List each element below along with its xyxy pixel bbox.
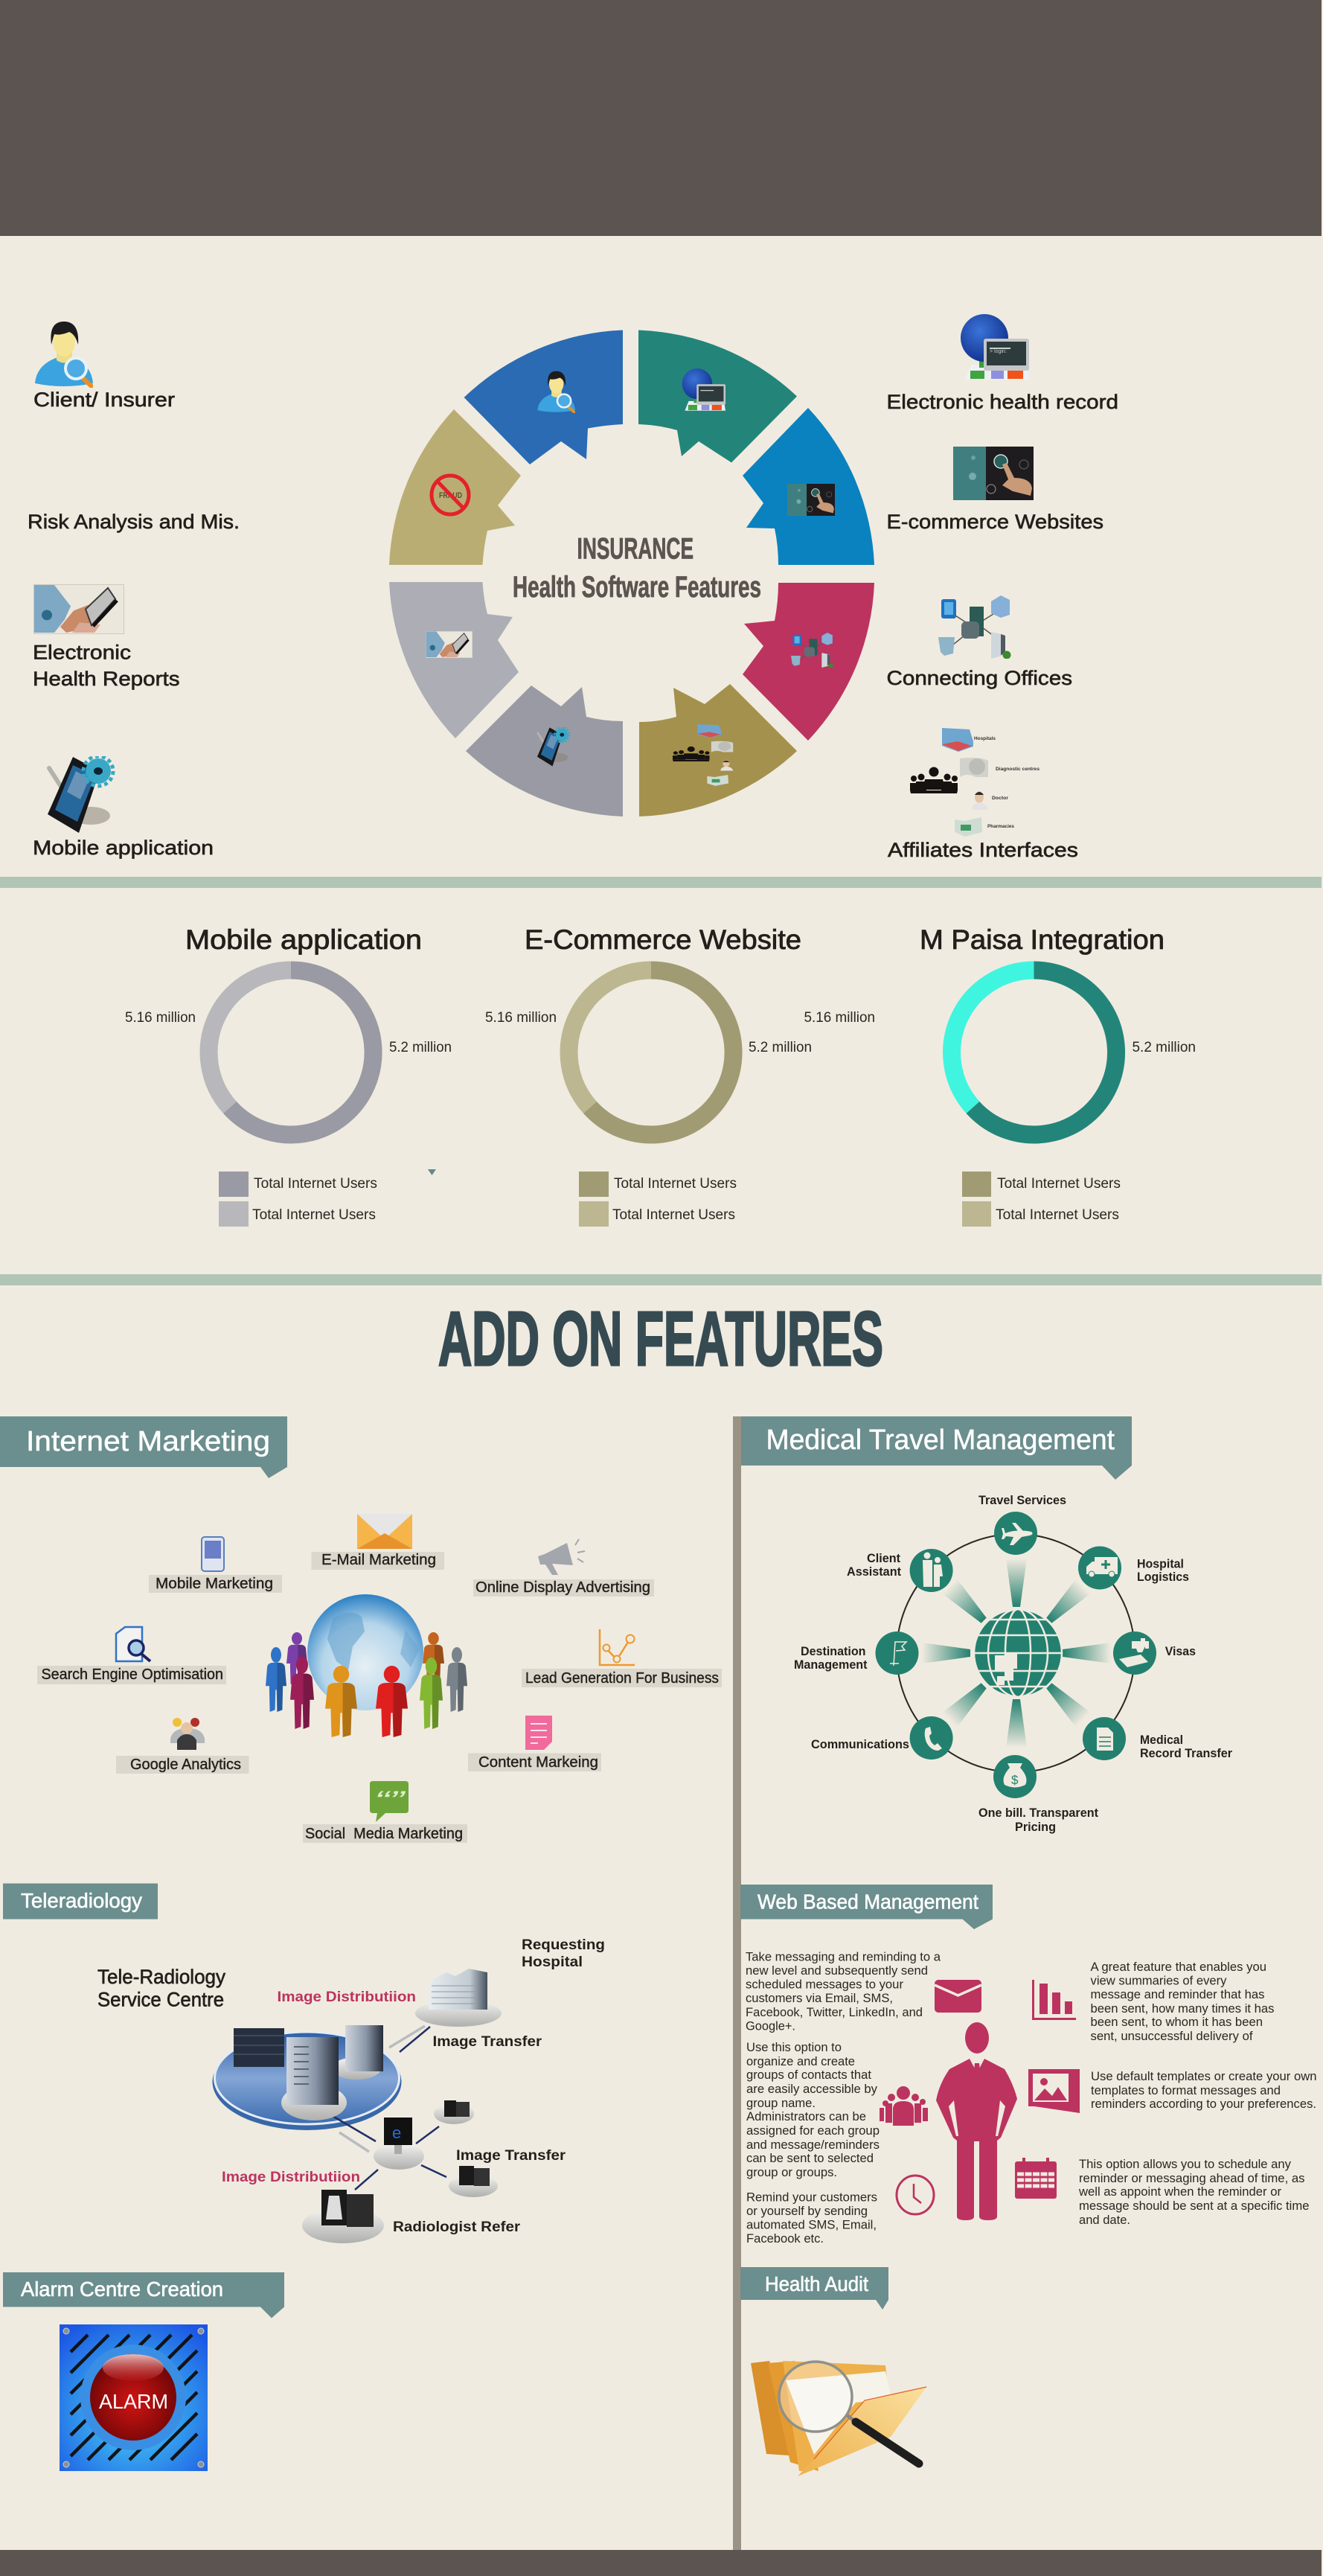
item: social media marketing: [303, 1781, 467, 1843]
icon: affiliates: Pharmacies: [987, 824, 1014, 829]
values: [485, 1010, 875, 1055]
center title: INSURANCE: [577, 533, 693, 566]
label: client: Client/ Insurer: [33, 389, 175, 411]
text: scheduled messages: Google+.: [746, 2020, 795, 2033]
node: medical record transfer: [1083, 1717, 1126, 1760]
panel: m paisa integration donut: [920, 924, 1196, 1227]
labels: Logistics: [1137, 1570, 1189, 1584]
item: online display advertising: Online Display Advertising: [475, 1579, 650, 1596]
icon: tablet photo: [34, 584, 124, 634]
icon: alarm button: [60, 2324, 208, 2471]
icon: calendar: [1015, 2158, 1057, 2199]
text: groups: group or groups.: [746, 2166, 837, 2179]
text: groups: groups of contacts that: [746, 2068, 871, 2082]
center title: Health Software Features: [513, 571, 761, 604]
text: reminders: automated SMS, Email,: [746, 2218, 877, 2231]
title: add on features: ADD ON FEATURES: [438, 1296, 883, 1381]
legend: Total Internet Users: [252, 1207, 376, 1223]
text: reminders: Facebook etc.: [746, 2232, 824, 2246]
service centre label: [97, 1966, 225, 2011]
text: groups: Use this option to: [746, 2041, 842, 2054]
section band: [0, 1274, 1322, 1285]
labels: Management: [794, 1658, 868, 1672]
item: lead generation: Lead Generation For Business: [525, 1670, 719, 1687]
text: summaries: view summaries of every: [1091, 1974, 1227, 1987]
teal globe: [974, 1609, 1062, 1697]
labels: Record Transfer: [1140, 1747, 1233, 1760]
panel: teleradiology: [3, 1883, 605, 2243]
viewer node bottom: [302, 2190, 384, 2243]
item: social media marketing: “”: [374, 1786, 406, 1815]
label: mobile application: Mobile application: [33, 837, 214, 859]
vertical divider: [733, 1416, 741, 2550]
requesting hospital label: [522, 1937, 605, 1970]
legend: Total Internet Users: [614, 1176, 737, 1192]
icon: connecting offices: [938, 595, 1010, 659]
wheel icon: client: [537, 371, 575, 412]
requesting hospital label: Requesting: [522, 1937, 605, 1953]
wheel segment: connecting offices: [743, 583, 874, 741]
banner: [740, 2267, 888, 2310]
footer bar: [0, 2550, 1322, 2576]
wheel segment: mobile: [466, 685, 623, 816]
item: e-mail marketing: E-Mail Marketing: [321, 1552, 436, 1568]
heading: Mobile application: [185, 924, 422, 955]
text: reminders: Remind your customers: [746, 2191, 877, 2205]
wheel icon: affiliates: [673, 724, 733, 786]
icon: electronic health record: > login:: [990, 349, 1007, 354]
text: groups: group name.: [746, 2097, 816, 2110]
item: mobile marketing: Mobile Marketing: [156, 1576, 273, 1592]
heading: E-Commerce Website: [525, 924, 801, 955]
node: client assistant: [910, 1549, 953, 1592]
item: mobile marketing: [149, 1537, 282, 1593]
legend: Total Internet Users: [612, 1207, 735, 1223]
text: groups: can be sent to selected: [746, 2152, 874, 2165]
item: content marketing: Content Markeing: [478, 1754, 598, 1771]
values: 5.16 million: [804, 1010, 875, 1026]
section band: [0, 877, 1322, 888]
wheel icon: connecting: [791, 633, 833, 668]
text: templates: Use default templates or create your own: [1091, 2070, 1317, 2083]
central disc: [213, 2032, 402, 2130]
value left: 5.16 million: [125, 1010, 196, 1026]
central globe with people: [266, 1594, 467, 1737]
icon: e-commerce photo: [953, 447, 1034, 500]
label: electronic health reports: Electronic: [33, 642, 131, 664]
diagram labels: Image Transfer: [433, 2034, 542, 2050]
text: scheduled messages: Take messaging and reminding to a: [746, 1950, 941, 1963]
text: summaries: been sent, how many times it has: [1091, 2002, 1274, 2016]
label: electronic health reports: Health Reports: [33, 668, 180, 690]
icon: affiliates: [910, 728, 1040, 837]
text: scheduling: [1078, 2158, 1310, 2227]
item: google analytics: [116, 1718, 249, 1774]
text: scheduling: message should be sent at a specific time: [1079, 2199, 1310, 2213]
node: destination management: [875, 1631, 918, 1675]
legend: Total Internet Users: [996, 1207, 1119, 1223]
wheel segment: electronic health record: [638, 330, 797, 463]
diagram labels: Image Distributiion: [277, 1989, 416, 2005]
donut chart: [209, 971, 374, 1134]
label: affiliates interfaces: Affiliates Interfaces: [888, 839, 1078, 861]
service centre label: Service Centre: [97, 1989, 224, 2011]
text: scheduled messages: scheduled messages to your: [746, 1978, 903, 1992]
icon: picture: [1028, 2069, 1080, 2113]
hospital node: [415, 1969, 502, 2027]
labels: Assistant: [847, 1565, 901, 1579]
ring: [897, 1534, 1135, 1772]
header bar: [0, 0, 1322, 236]
label: electronic health record: Electronic health record: [887, 391, 1118, 413]
servers: [234, 2025, 383, 2120]
icon: group: [880, 2086, 928, 2126]
item: search engine optimisation: [37, 1627, 226, 1684]
icon: envelope: [935, 1980, 981, 2013]
text: groups: assigned for each group: [746, 2124, 880, 2138]
label: risk analysis: Risk Analysis and Mis.: [28, 511, 240, 533]
diagram labels: Radiologist Refer: [393, 2219, 521, 2235]
workstation node: e: [392, 2123, 401, 2142]
panel: health audit: [740, 2267, 926, 2476]
labels: Hospital: [1137, 1557, 1184, 1570]
text: summaries: [1091, 1960, 1274, 2043]
text: scheduling: This option allows you to schedule any: [1079, 2158, 1292, 2171]
text: summaries: message and reminder that has: [1091, 1988, 1265, 2001]
center title: [513, 533, 761, 604]
text: scheduled messages: Facebook, Twitter, LinkedIn, and: [746, 2006, 923, 2019]
node: one bill transparent pricing: $: [1011, 1773, 1019, 1787]
legend: Total Internet Users: [254, 1176, 377, 1192]
donut chart: [569, 971, 734, 1134]
text: summaries: A great feature that enables you: [1091, 1960, 1266, 1974]
banner: Teleradiology: [21, 1889, 142, 1912]
panel: medical travel management: [741, 1416, 1233, 1834]
banner: Health Audit: [765, 2272, 868, 2295]
wheel icon: no fraud: [432, 476, 469, 514]
legend: Total Internet Users: [997, 1176, 1121, 1192]
icon: businessman: [936, 2022, 1017, 2220]
text: reminders: or yourself by sending: [746, 2205, 868, 2218]
item: social media marketing: Social Media Marketing: [305, 1826, 463, 1842]
labels: One bill. Transparent: [978, 1806, 1098, 1820]
banner: Web Based Management: [757, 1891, 978, 1913]
wheel segment: affiliates: [639, 684, 797, 816]
text: groups: and message/reminders: [746, 2138, 880, 2152]
text: scheduled messages: customers via Email, SMS,: [746, 1992, 893, 2005]
labels: Visas: [1165, 1645, 1196, 1658]
banner: [0, 1416, 287, 1478]
wheel segment: health reports: [389, 582, 519, 738]
icon: client: [35, 322, 93, 386]
wheel icon: tablet photo: [426, 631, 472, 658]
value right: 5.2 million: [389, 1040, 452, 1055]
wheel segment: risk analysis: [389, 409, 521, 565]
node: communications: [910, 1716, 953, 1760]
node: visas: [1113, 1631, 1156, 1675]
values: 5.2 million: [749, 1040, 812, 1055]
value: 5.2 million: [1133, 1040, 1196, 1055]
service centre label: Tele-Radiology: [97, 1966, 225, 1988]
connection arrows: [329, 2026, 446, 2190]
panel: health software features wheel: [389, 330, 874, 816]
labels: [794, 1494, 1233, 1834]
text: scheduled messages: [746, 1950, 941, 2033]
item: google analytics: Google Analytics: [130, 1757, 241, 1773]
text: summaries: been sent, to whom it has been: [1091, 2016, 1263, 2029]
text: templates: templates to format messages and: [1091, 2084, 1281, 2097]
text: scheduling: well as appoint when the reminder or: [1078, 2185, 1282, 2199]
legend: [579, 1172, 737, 1227]
wheel segment: client: [464, 330, 623, 464]
banner: Alarm Centre Creation: [21, 2278, 223, 2301]
network diagram: [213, 1969, 502, 2243]
icon: electronic health record: [961, 314, 1029, 380]
text: scheduled messages: new level and subsequently send: [746, 1964, 928, 1978]
text: summaries: sent, unsuccessful delivery of: [1091, 2030, 1253, 2043]
icon: affiliates: Doctor: [992, 796, 1008, 801]
labels: Pricing: [1015, 1821, 1056, 1834]
node: one bill transparent pricing: [993, 1755, 1037, 1798]
labels: Destination: [801, 1645, 866, 1658]
text: groups: Administrators can be: [746, 2110, 866, 2123]
banner: Internet Marketing: [26, 1426, 270, 1457]
panel: internet marketing: [0, 1416, 722, 1843]
workstation node: [374, 2118, 424, 2170]
text: groups: [746, 2041, 880, 2179]
wheel icon: no fraud: FRAUD: [439, 491, 462, 500]
diagram labels: Image Transfer: [456, 2148, 566, 2164]
wheel icon: touch photo: [787, 484, 835, 516]
label: connecting offices: Connecting Offices: [887, 667, 1072, 689]
panel: e-commerce website donut: [485, 924, 875, 1227]
banner: [3, 1883, 158, 1919]
text: scheduling: reminder or messaging ahead of time, as: [1079, 2172, 1305, 2185]
text: templates: reminders according to your preferences.: [1091, 2097, 1316, 2111]
viewer node top: [434, 2100, 474, 2124]
icon: clock: [897, 2176, 934, 2214]
donut chart: [952, 970, 1116, 1134]
text: groups: organize and create: [746, 2055, 855, 2068]
label: electronic health reports: [33, 642, 180, 690]
banner: [741, 1416, 1132, 1480]
text: templates: [1091, 2070, 1317, 2111]
item: content marketing: [468, 1716, 601, 1771]
item: online display advertising: [473, 1539, 654, 1597]
labels: Client: [867, 1552, 900, 1565]
panel: web based management: [740, 1885, 1317, 2246]
heading: M Paisa Integration: [920, 924, 1165, 955]
wheel segment: e-commerce: [743, 408, 874, 565]
labels: Medical: [1140, 1733, 1183, 1747]
requesting hospital label: Hospital: [522, 1955, 583, 1970]
item: search engine optimisation: Search Engine Optimisation: [42, 1666, 223, 1683]
labels: Travel Services: [978, 1494, 1066, 1507]
viewer node middle: [449, 2166, 498, 2197]
icon: alarm button: ALARM: [99, 2390, 168, 2413]
node: travel services: [994, 1512, 1037, 1555]
legend: [219, 1172, 377, 1227]
text: reminders: [746, 2191, 877, 2246]
text: groups: are easily accessible by: [746, 2083, 878, 2096]
icon: bar chart: [1032, 1980, 1076, 2020]
icon: mobile application: [48, 756, 113, 833]
labels: Communications: [811, 1738, 909, 1751]
panel: alarm centre creation: [3, 2272, 284, 2471]
item: lead generation: [522, 1629, 722, 1687]
panel: mobile application donut: [125, 924, 452, 1227]
icon: folder with magnifier: [751, 2361, 926, 2476]
wheel icon: terminal: [682, 368, 725, 411]
icon: affiliates: Diagnostic centres: [996, 767, 1040, 772]
rays from globe: [922, 1559, 1111, 1748]
small marker: [428, 1169, 436, 1175]
banner: Medical Travel Management: [766, 1425, 1115, 1456]
banner: [3, 2272, 284, 2318]
node: hospital logistics: [1078, 1547, 1121, 1590]
diagram labels: [222, 1989, 566, 2235]
diagram labels: Image Distributiion: [222, 2170, 360, 2185]
text: scheduling: and date.: [1079, 2214, 1130, 2227]
wheel icon: mobile gear: [537, 727, 569, 766]
item: e-mail marketing: [311, 1514, 444, 1570]
values: 5.16 million: [485, 1010, 557, 1026]
legend: [962, 1172, 1121, 1227]
banner: [740, 1885, 993, 1929]
icon: affiliates: Hospitals: [974, 736, 996, 741]
label: e-commerce websites: E-commerce Websites: [887, 511, 1103, 533]
